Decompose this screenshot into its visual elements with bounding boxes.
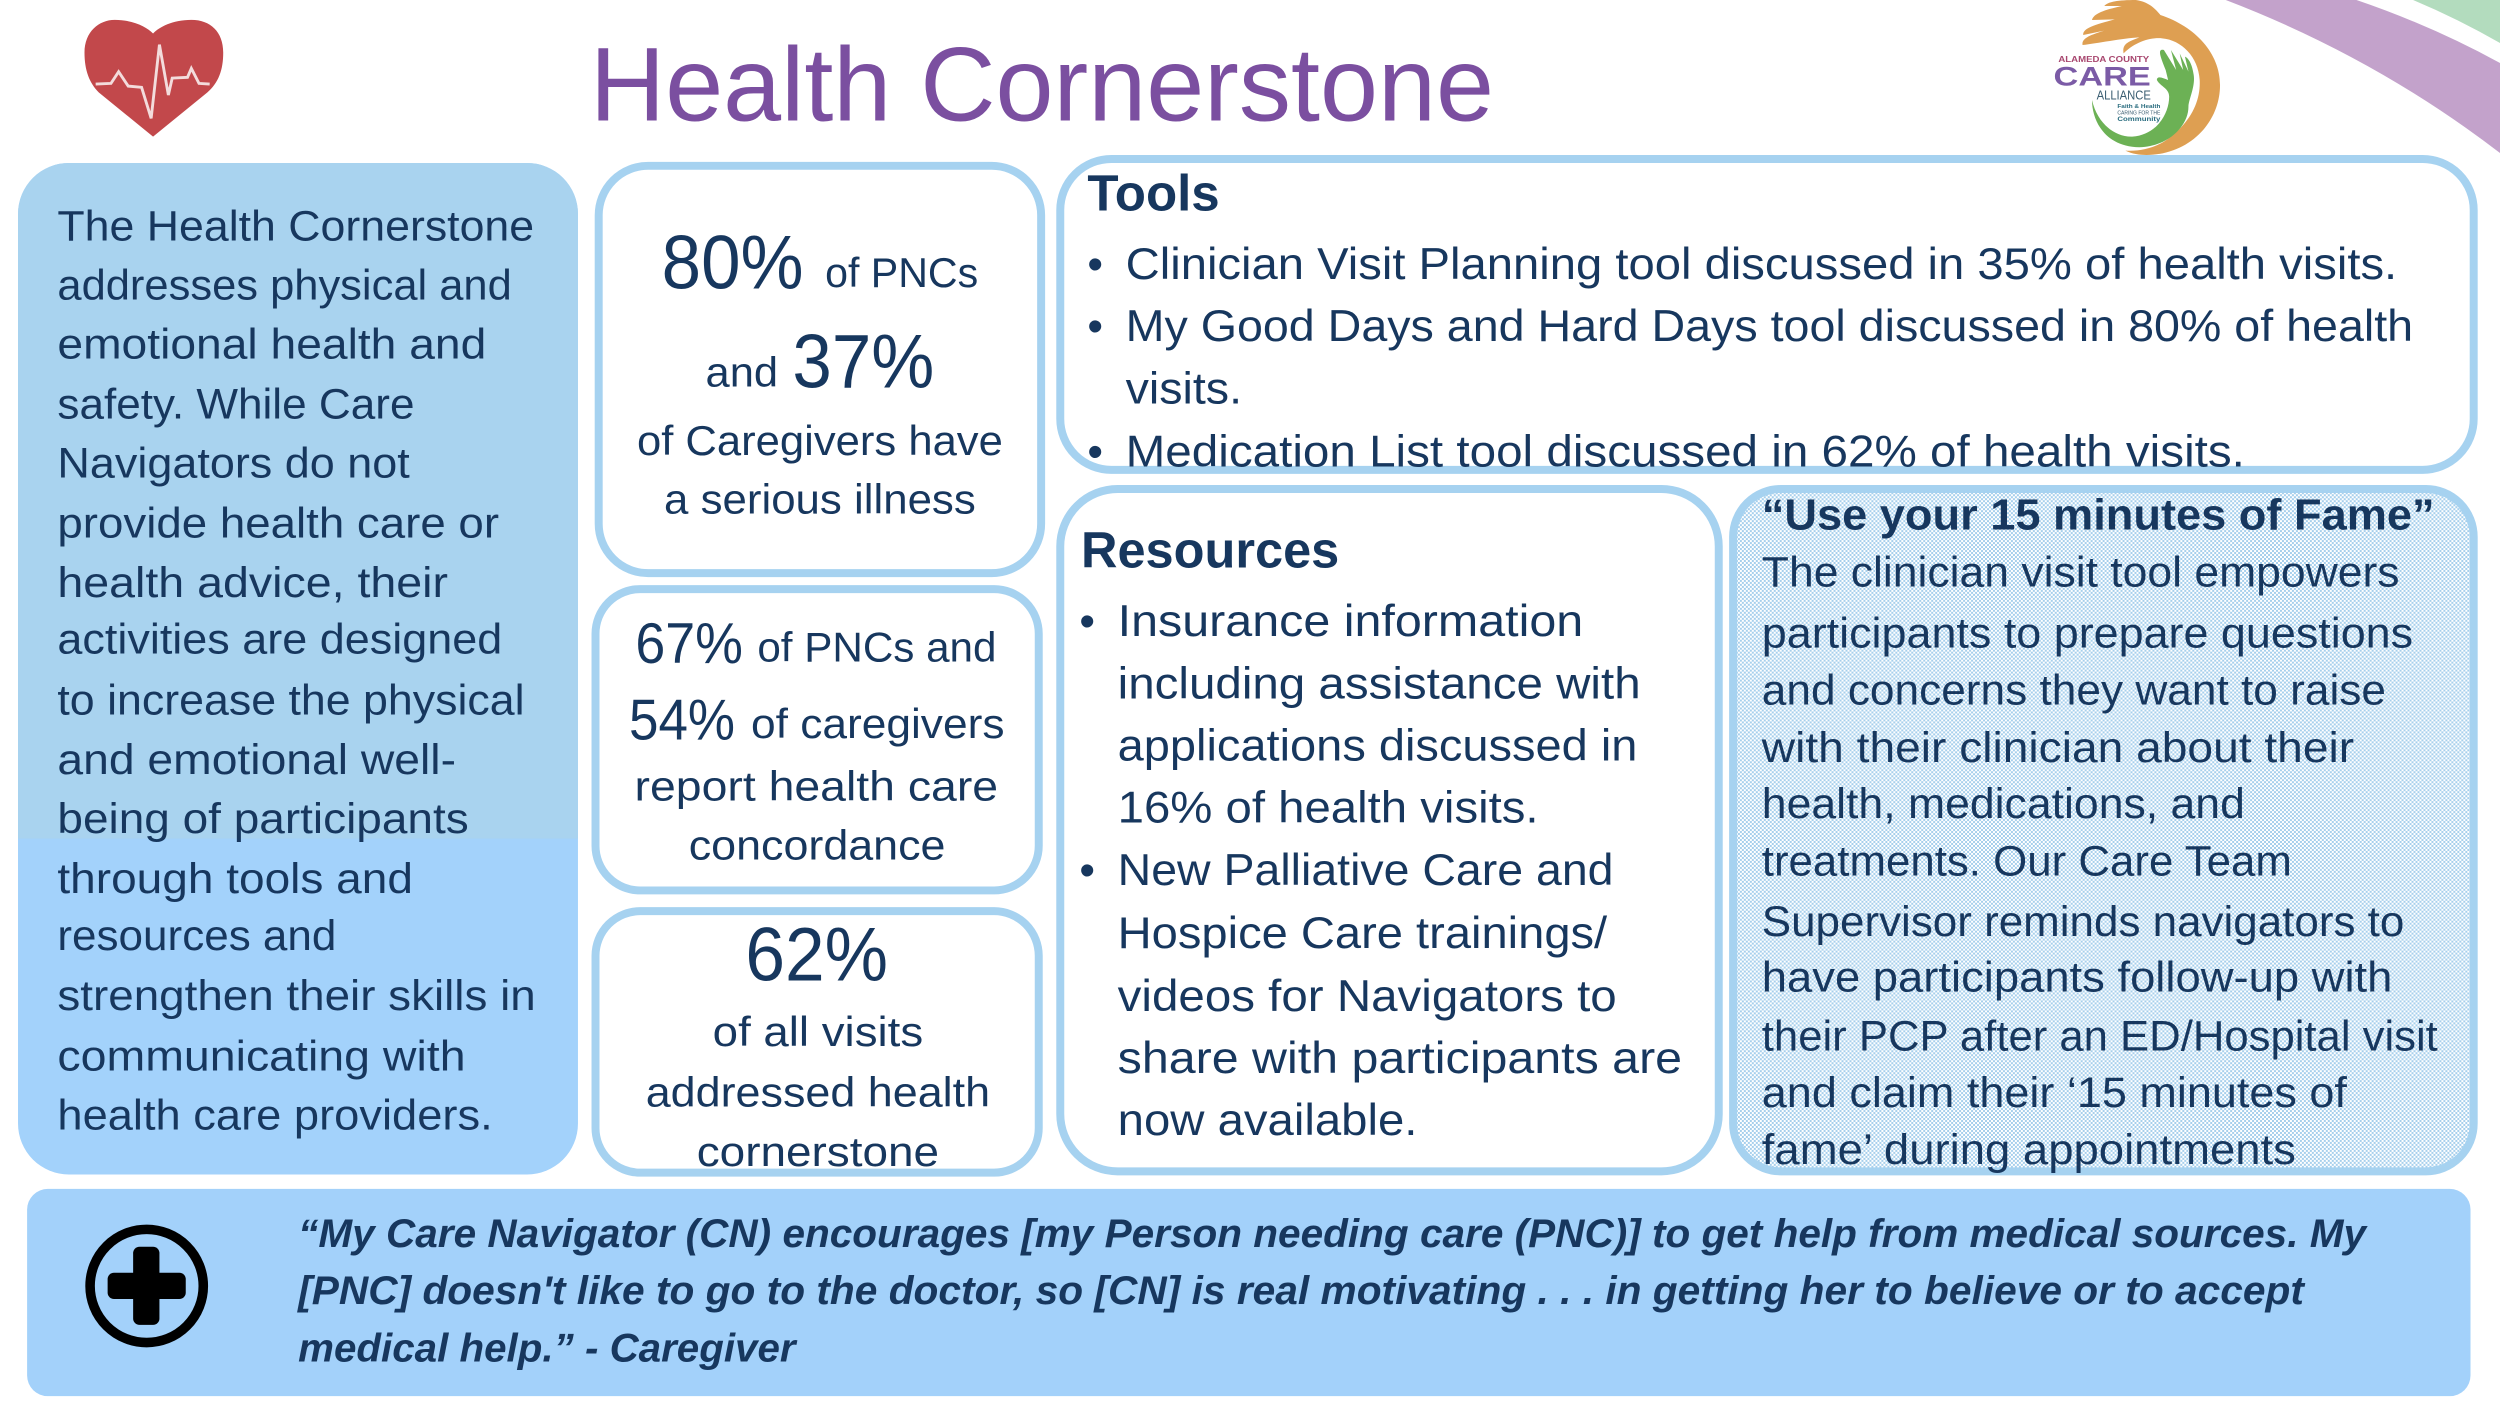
panel: 15 minutes of fame callout — [1733, 489, 2474, 1173]
panel: visits addressing health statistic: of all visits — [713, 1008, 923, 1055]
panel: intro description: and emotional well- — [57, 736, 456, 783]
panel: health care concordance statistic — [596, 589, 1039, 890]
panel: resources: New Palliative Care and — [1118, 846, 1614, 895]
panel: 15 minutes of fame callout: fame’ during appointments — [1762, 1126, 2296, 1173]
logo: Alameda County Care Alliance: Faith & Health — [2117, 104, 2161, 110]
logo: Alameda County Care Alliance: Community — [2117, 116, 2161, 123]
logo: Alameda County Care Alliance: CARING FOR THE — [2117, 111, 2161, 117]
logo: Alameda County Care Alliance: ALAMEDA COUNTY — [2058, 54, 2150, 64]
panel: tools: Medication List tool discussed in 62% of health visits. — [1126, 428, 2245, 477]
panel: 15 minutes of fame callout: and claim their ‘15 minutes of — [1762, 1069, 2347, 1116]
panel: tools: visits. — [1126, 364, 1242, 413]
panel: visits addressing health statistic: cornerstone — [697, 1128, 939, 1175]
panel: health care concordance statistic: of PNCs and — [757, 624, 996, 671]
panel: 15 minutes of fame callout: their PCP after an ED/Hospital visit — [1762, 1013, 2438, 1060]
panel: serious illness statistic: 37% — [792, 319, 934, 404]
panel: intro description: emotional health and — [57, 321, 486, 368]
panel: serious illness statistic: of Caregivers have — [637, 417, 1003, 464]
panel: 15 minutes of fame callout: “Use your 15 minutes of Fame” — [1762, 490, 2435, 539]
panel: serious illness statistic: a serious illness — [664, 475, 976, 522]
logo: Alameda County Care Alliance: ALLIANCE — [2097, 88, 2151, 103]
panel: intro description: resources and — [57, 912, 336, 959]
panel: intro description: health advice, their — [57, 559, 448, 606]
panel: tools: Clinician Visit Planning tool discussed in 35% of health visits. — [1126, 240, 2397, 289]
logo: Alameda County Care Alliance — [2054, 0, 2220, 155]
panel: resources: • — [1079, 846, 1095, 895]
panel: intro description: through tools and — [57, 855, 413, 902]
panel: intro description: safety. While Care — [57, 381, 415, 428]
panel: caregiver quote banner: medical help.” - Caregiver — [298, 1327, 798, 1371]
panel: tools: Tools — [1087, 164, 1220, 221]
icon: heart with ECG line — [85, 20, 223, 137]
panel: tools: • — [1087, 302, 1103, 351]
panel: intro description: The Health Cornerstone — [57, 203, 534, 250]
panel: 15 minutes of fame callout: The clinician visit tool empowers — [1762, 549, 2400, 596]
panel: tools — [1060, 159, 2474, 477]
panel: caregiver quote banner — [27, 1189, 2471, 1396]
panel: intro description — [18, 163, 578, 1175]
panel: serious illness statistic — [599, 166, 1041, 573]
panel: resources: • — [1079, 597, 1095, 646]
panel: intro description: addresses physical and — [57, 262, 512, 309]
panel: health care concordance statistic: 67% — [635, 612, 743, 676]
panel: serious illness statistic: 80% — [662, 221, 804, 306]
panel: intro description: provide health care or — [57, 499, 499, 546]
panel: intro description: communicating with — [57, 1033, 466, 1080]
panel: resources: applications discussed in — [1118, 721, 1637, 770]
panel: 15 minutes of fame callout: have participants follow-up with — [1762, 954, 2392, 1001]
panel: health care concordance statistic: of caregivers — [751, 700, 1004, 747]
panel: intro description: to increase the physical — [57, 676, 525, 723]
panel: 15 minutes of fame callout: with their clinician about their — [1761, 724, 2354, 771]
panel: 15 minutes of fame callout: health, medications, and — [1762, 780, 2245, 827]
panel: serious illness statistic: and — [706, 349, 778, 396]
panel: resources: Resources — [1081, 522, 1339, 579]
decorative corner arcs — [2226, 0, 2500, 153]
panel: tools: • — [1087, 428, 1103, 477]
panel: resources: Insurance information — [1118, 597, 1583, 646]
panel: resources — [1060, 489, 1719, 1171]
panel: visits addressing health statistic: addressed health — [646, 1068, 990, 1115]
panel: 15 minutes of fame callout: and concerns they want to raise — [1762, 667, 2386, 714]
logo: Alameda County Care Alliance: CARE — [2054, 60, 2151, 91]
panel: caregiver quote banner: [PNC] doesn't like to go to the doctor, so [CN] is real motivating . . . in getting her to believe or to accept — [296, 1269, 2306, 1313]
panel: intro description: activities are designed — [57, 616, 502, 663]
panel: visits addressing health statistic — [596, 911, 1039, 1175]
panel: health care concordance statistic: 54% — [629, 689, 735, 753]
panel: tools: • — [1087, 240, 1103, 289]
panel: intro description: strengthen their skills in — [57, 972, 536, 1019]
panel: resources: Hospice Care trainings/ — [1118, 909, 1608, 958]
panel: resources: now available. — [1118, 1096, 1417, 1145]
panel: resources: videos for Navigators to — [1118, 972, 1617, 1021]
panel: health care concordance statistic: concordance — [689, 821, 945, 868]
panel: serious illness statistic: of PNCs — [825, 249, 978, 296]
panel: 15 minutes of fame callout: treatments. Our Care Team — [1762, 837, 2292, 884]
panel: 15 minutes of fame callout: participants to prepare questions — [1762, 609, 2413, 656]
panel: 15 minutes of fame callout: Supervisor reminds navigators to — [1762, 898, 2404, 945]
panel: intro description: health care providers. — [57, 1092, 493, 1139]
panel: visits addressing health statistic: 62% — [745, 913, 888, 998]
panel: tools: My Good Days and Hard Days tool discussed in 80% of health — [1126, 302, 2413, 351]
icon: medical cross in circle — [90, 1229, 203, 1343]
title: Health Cornerstone — [590, 26, 1494, 143]
panel: intro description: Navigators do not — [57, 439, 410, 486]
panel: intro description: being of participants — [57, 795, 469, 842]
panel: resources: including assistance with — [1118, 659, 1641, 708]
panel: resources: share with participants are — [1118, 1034, 1682, 1083]
panel: health care concordance statistic: report health care — [635, 762, 998, 809]
panel: resources: 16% of health visits. — [1118, 784, 1539, 833]
panel: caregiver quote banner: “My Care Navigator (CN) encourages [my Person needing care (PNC)] to get help from medical sources. My — [298, 1212, 2368, 1256]
